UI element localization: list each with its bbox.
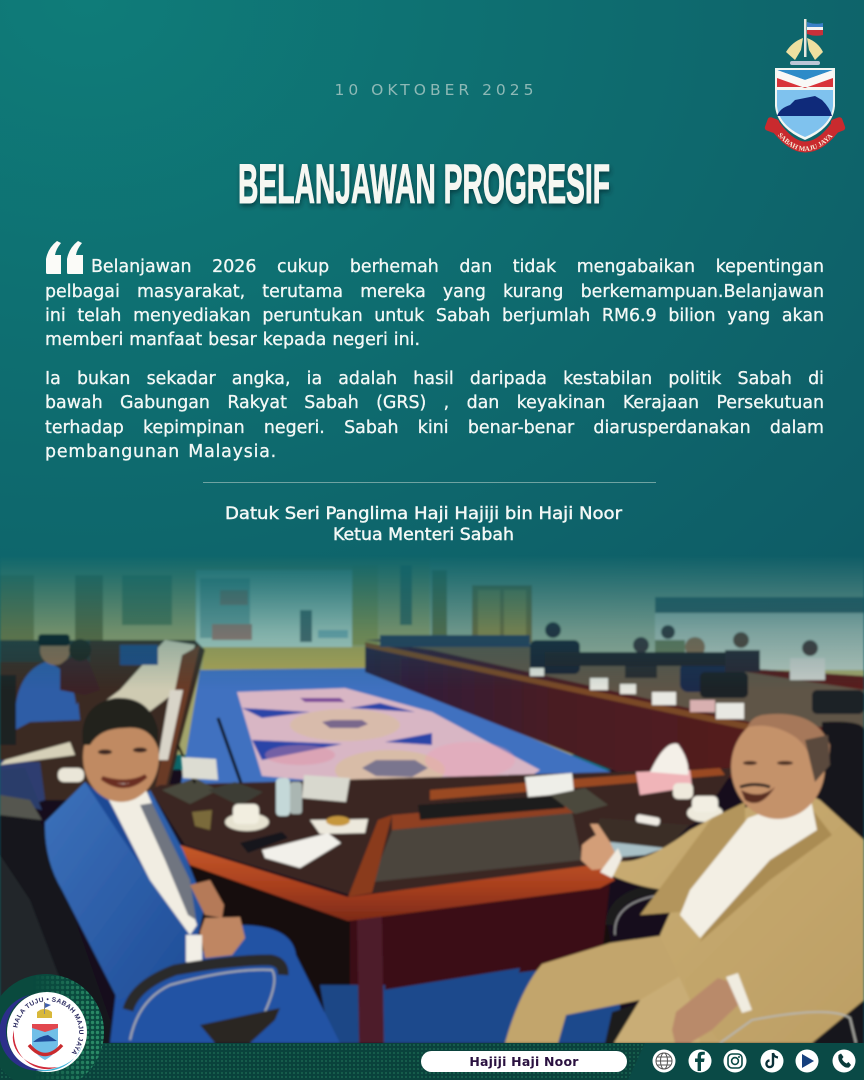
signature: Ketua Menteri Sabah (333, 525, 514, 544)
icon: facebook (688, 1050, 712, 1072)
emblem: Sabah coat of arms (764, 19, 846, 152)
ribbon with motto: SABAH MAJU JAYA (778, 132, 833, 152)
name pill (421, 1051, 627, 1072)
signature (225, 504, 622, 544)
background: teal gradient (0, 0, 864, 570)
left side table and seated guests (0, 634, 205, 815)
wall below screen (203, 647, 366, 671)
icon: play (796, 1050, 818, 1072)
date: 10 OKTOBER 2025 (334, 81, 538, 99)
shirt and tie (108, 790, 197, 935)
icon: instagram (724, 1050, 746, 1072)
flag and pole (804, 19, 823, 57)
armrest (128, 960, 283, 1010)
man in blue suit (0, 698, 340, 1043)
jacket (45, 782, 205, 1000)
quote text: memberi manfaat besar kepada negeri ini. (45, 330, 420, 350)
quote text: pembangunan Malaysia. (45, 442, 277, 462)
table items: mics, cards, cups, tissue box (162, 778, 218, 804)
signature: Datuk Seri Panglima Haji Hajiji bin Haji Noor (225, 504, 622, 523)
quote text: terhadap kepimpinan negeri. Sabah kini benar-benar diarusperdanakan dalam (45, 418, 824, 438)
office chair (1, 817, 111, 1043)
small crest (29, 1002, 62, 1060)
legs (110, 925, 340, 1043)
black chair behind him (820, 722, 864, 845)
quote text: bawah Gabungan Rakyat Sabah (GRS) , dan keyakinan Kerajaan Persekutuan (45, 393, 824, 413)
hands (190, 880, 224, 918)
jacket (610, 790, 864, 1043)
shirt (680, 795, 817, 938)
logo badge: Hala Tuju Sabah Maju Jaya (0, 974, 104, 1080)
ring swoosh (0, 995, 82, 1071)
far right table and delegates (365, 622, 864, 778)
door (472, 585, 532, 643)
icon: tiktok (760, 1050, 784, 1072)
quote text (45, 257, 824, 462)
legs (505, 930, 720, 1043)
divider (203, 482, 656, 483)
footer bar (0, 1043, 864, 1080)
wall pattern band (655, 597, 864, 613)
head (731, 715, 825, 819)
quote text: Ia bukan sekadar angka, ia adalah hasil daripada kestabilan politik Sabah di (45, 369, 824, 389)
name pill: Hajiji Haji Noor (469, 1054, 579, 1069)
hand on knee (672, 978, 738, 1043)
projection screen (196, 570, 352, 647)
blue carpet with rug (179, 666, 612, 786)
icon: phone (832, 1050, 856, 1072)
man in tan suit (505, 714, 864, 1043)
ribbon with motto (764, 117, 846, 152)
quote text: ini telah menyediakan peruntukan untuk Sabah berjumlah RM6.9 bilion yang akan (45, 306, 824, 326)
quote text: pelbagai masyarakat, terutama mereka yang kurang berkemampuan.Belanjawan (45, 282, 824, 302)
icon: quotation mark (46, 241, 83, 274)
hand on thumb up (581, 824, 616, 870)
motto: HALA TUJU • SABAH MAJU JAYA (12, 997, 84, 1054)
photo: meeting room with two men at a table (0, 562, 864, 1043)
shield (775, 68, 835, 140)
quote text: Belanjawan 2026 cukup berhemah dan tidak mengabaikan kepentingan (91, 257, 824, 277)
social icons (652, 1050, 856, 1072)
room walls (0, 555, 864, 755)
icon: globe (652, 1050, 676, 1072)
photo base (0, 770, 864, 1050)
foreground table (150, 718, 735, 1043)
head (83, 712, 159, 802)
crest arms (786, 38, 823, 65)
